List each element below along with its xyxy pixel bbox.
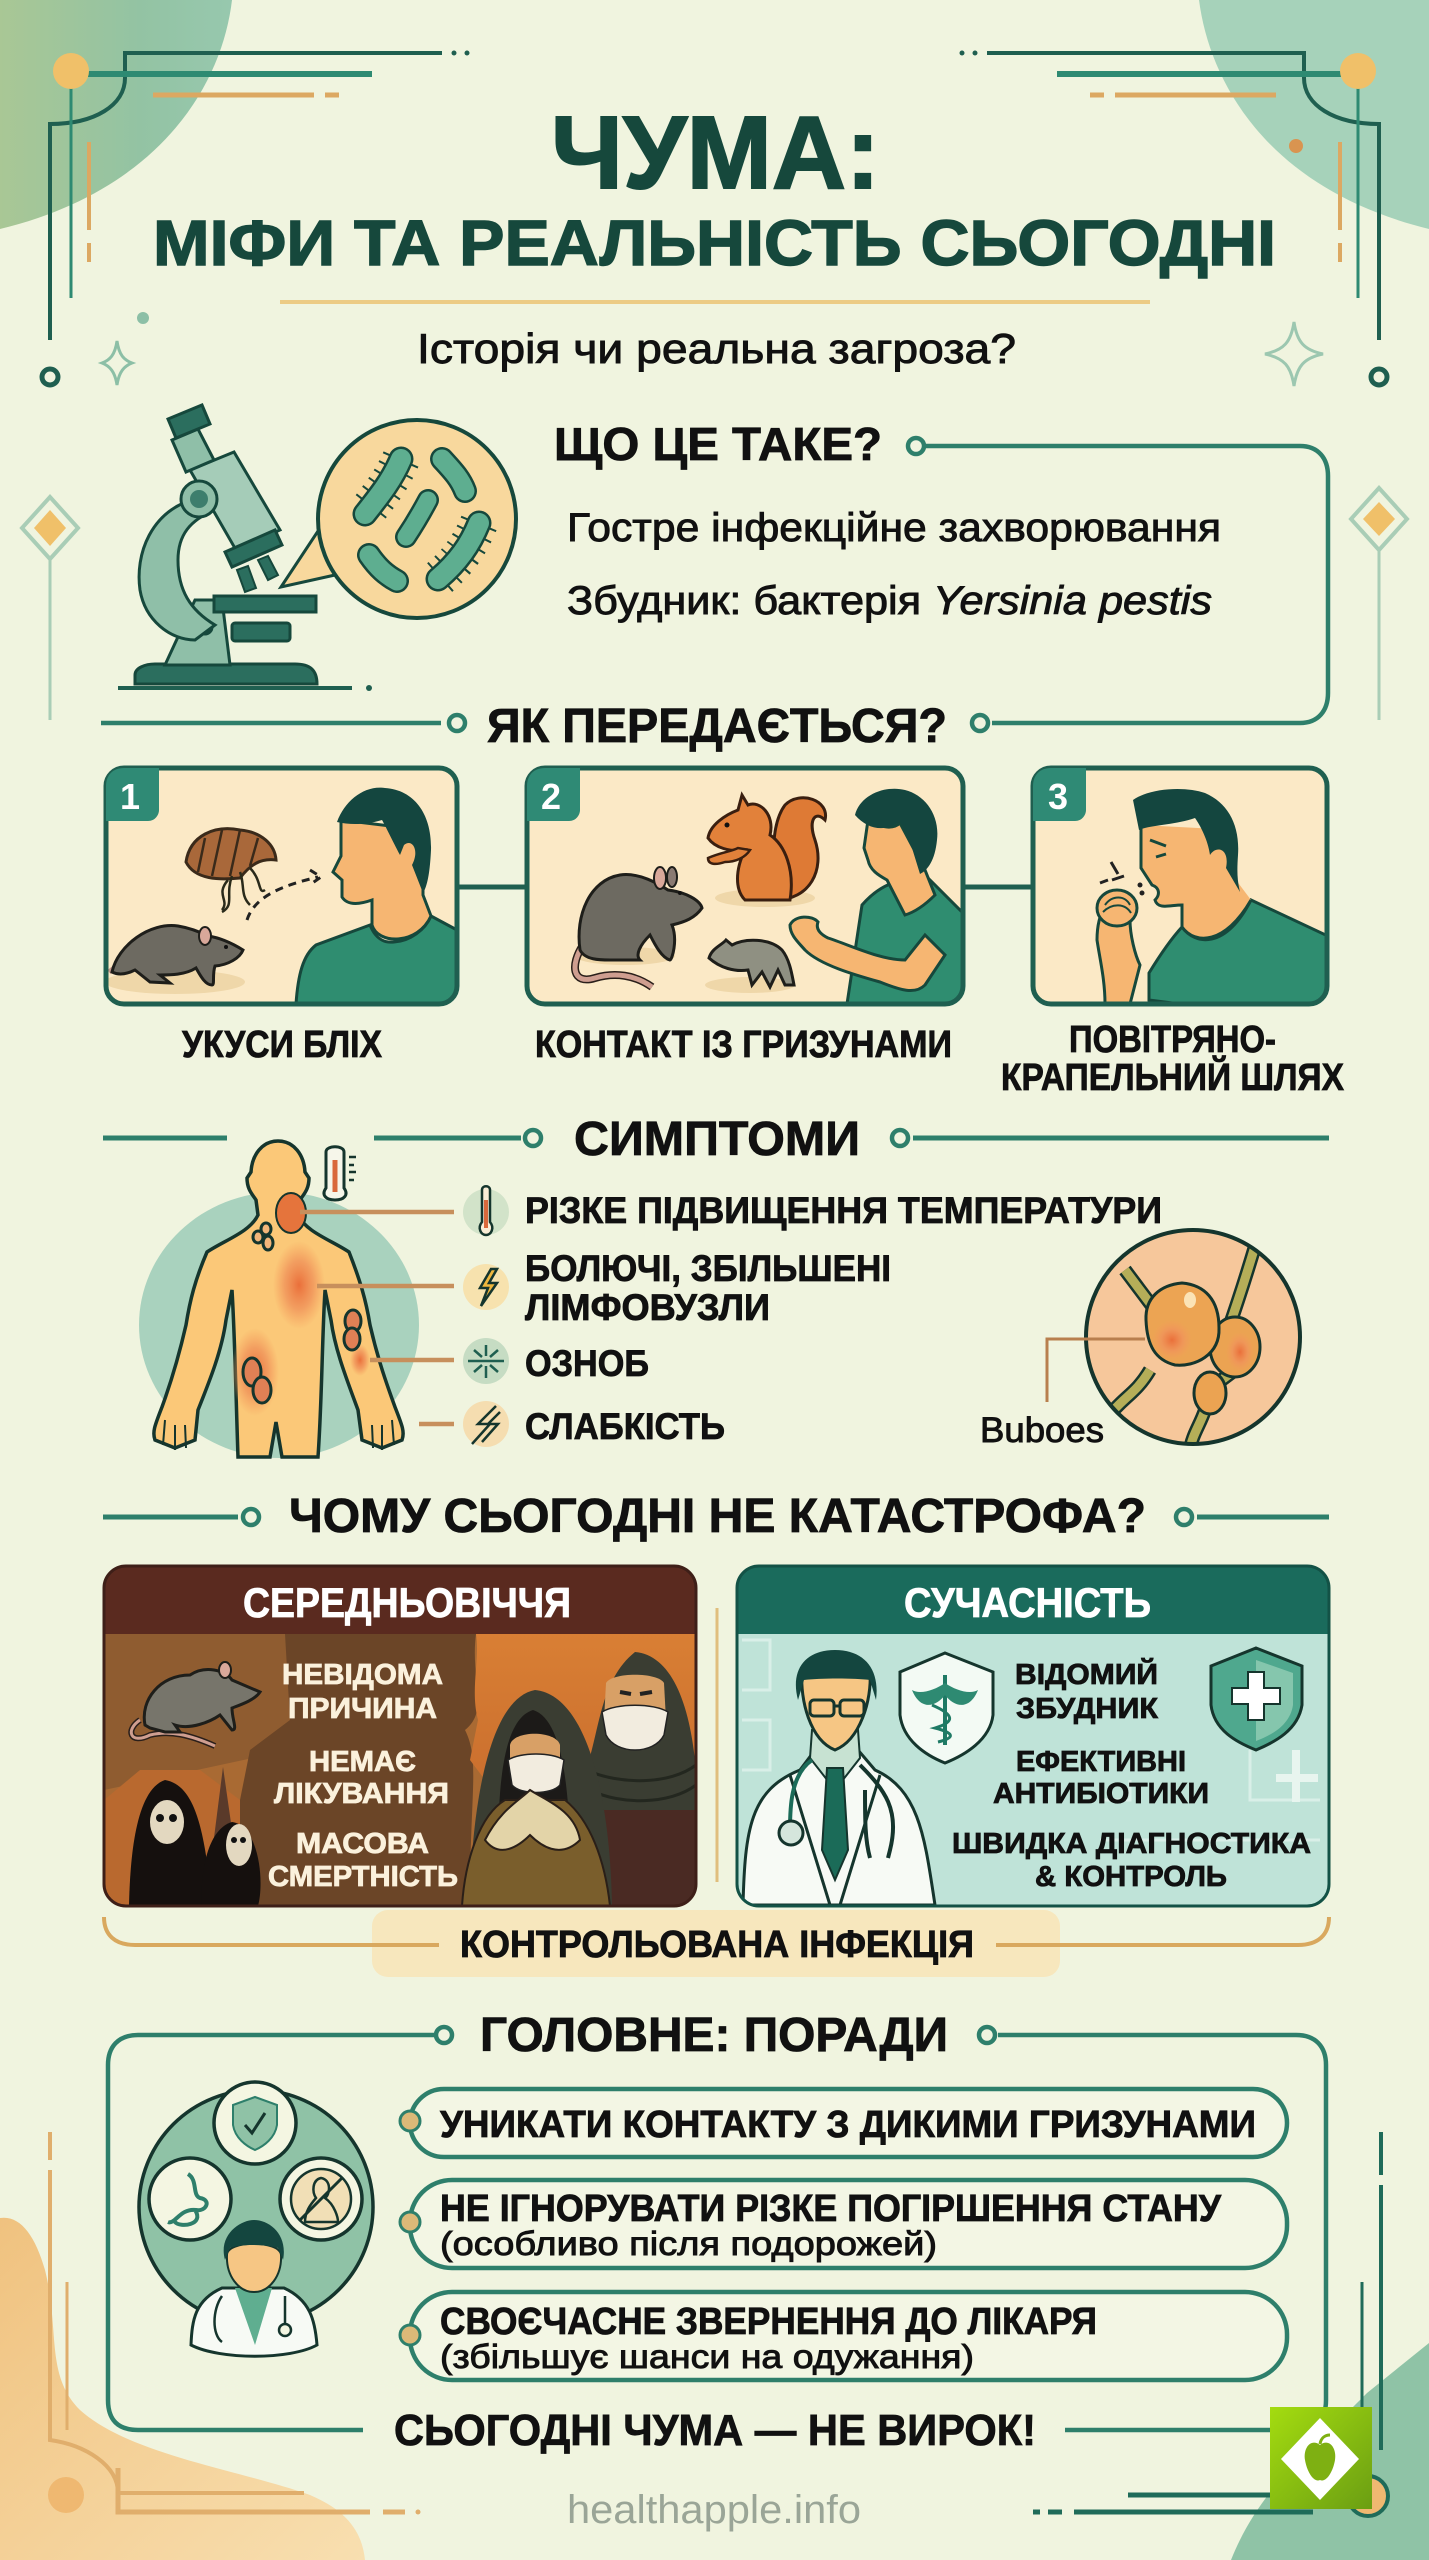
panel: contact with rodents [527,766,965,1005]
figure: doctor [743,1650,935,1905]
icon: thermometer [324,1147,356,1200]
divider between cards [716,1608,718,1882]
pill: avoid rodents: УНИКАТИ КОНТАКТУ З ДИКИМИ ГРИЗУНАМИ [440,2104,1256,2146]
section heading: why not a catastrophe [103,1490,1329,1543]
figure: woman in mask [462,1690,612,1906]
icon: fever [463,1186,509,1235]
bubo close-up [1047,1230,1300,1450]
panel: middle ages [104,1566,696,1906]
pill: do not ignore: НЕ ІГНОРУВАТИ РІЗКЕ ПОГІРШЕННЯ СТАНУ [440,2188,1221,2230]
section heading: transmission: ЯК ПЕРЕДАЄТЬСЯ? [487,700,947,753]
connectors between panels [457,884,1033,890]
number badge 2 [527,768,580,821]
card title: middle ages: СЕРЕДНЬОВІЧЧЯ [243,1579,571,1626]
icon cluster: doctor and advice [139,2082,373,2356]
card text: modern day: ШВИДКА ДІАГНОСТИКА [952,1828,1311,1860]
icon: small rat [709,940,794,987]
person coughing [1097,789,1330,1004]
label: rodent contact: КОНТАКТ ІЗ ГРИЗУНАМИ [535,1024,952,1066]
bracket [104,1917,1329,1945]
pill: see a doctor: (збільшує шанси на одужання) [440,2338,974,2375]
label: airborne [1001,1019,1345,1099]
frame: advice [108,2035,1326,2430]
number badge 3 [1033,768,1086,821]
title underline [280,300,1150,304]
figures: reapers [129,1780,261,1906]
title: ЧУМА: [551,95,880,210]
pill: avoid rodents [400,2089,1287,2157]
text: chills: ОЗНОБ [525,1343,649,1384]
card text: modern day: ЗБУДНИК [1016,1693,1158,1725]
section heading: symptoms [103,1113,1329,1166]
icon: no-contact [280,2158,362,2240]
number badge 1: 1 [120,776,140,817]
number badge 3: 3 [1048,776,1068,817]
text: controlled infection: КОНТРОЛЬОВАНА ІНФЕКЦІЯ [460,1924,974,1966]
card text: middle ages: СМЕРТНІСТЬ [268,1861,458,1893]
person [296,788,457,1004]
text: fever: РІЗКЕ ПІДВИЩЕННЯ ТЕМПЕРАТУРИ [525,1190,1162,1231]
decorative blob: top right [1199,0,1429,229]
title: МІФИ ТА РЕАЛЬНІСТЬ СЬОГОДНІ [153,207,1276,279]
heading: advice: ГОЛОВНЕ: ПОРАДИ [480,2009,948,2062]
card text: middle ages: НЕВІДОМА [282,1659,443,1691]
text: causative agent: Збудник: бактерія Yersinia pestis [567,579,1212,623]
subtitle: Історія чи реальна загроза? [417,325,1016,372]
site name: healthapple.info [567,2488,861,2532]
text: definition: Гостре інфекційне захворювання [567,506,1221,550]
icon: pain bolt [463,1264,509,1310]
card title: modern day: СУЧАСНІСТЬ [904,1579,1151,1626]
text: lymph nodes: БОЛЮЧІ, ЗБІЛЬШЕНІ [525,1248,891,1289]
card text: middle ages: МАСОВА [296,1828,429,1860]
icon: bacteria bubble [281,420,516,618]
panel: modern day [737,1566,1329,1906]
pill: see a doctor: СВОЄЧАСНЕ ЗВЕРНЕННЯ ДО ЛІКАРЯ [440,2301,1097,2343]
figure: man in mask [586,1652,696,1810]
closing statement: СЬОГОДНІ ЧУМА — НЕ ВИРОК! [394,2406,1036,2455]
card text: middle ages: ЛІКУВАННЯ [274,1778,449,1810]
section heading: what is it: ЩО ЦЕ ТАКЕ? [554,418,882,470]
card text: modern day: ВІДОМИЙ [1015,1657,1158,1691]
card text: modern day [952,1657,1311,1893]
number badge 1 [106,768,159,821]
card text: modern day: & КОНТРОЛЬ [1035,1861,1227,1893]
arrow: flea to person [247,870,321,920]
label: buboes: Buboes [980,1411,1104,1450]
icon: caduceus shield [900,1653,993,1763]
icon: rodent avoidance [149,2158,231,2240]
label: airborne: ПОВІТРЯНО- [1069,1019,1276,1061]
frame corner: bottom right [1033,2132,1388,2516]
card text: middle ages: НЕМАЄ [309,1746,416,1778]
pill: see a doctor [400,2292,1287,2380]
connector frame: what is it to transmission [908,438,1328,731]
body diagram [139,1141,419,1458]
card text: modern day: ЕФЕКТИВНІ [1016,1746,1186,1778]
side ornament: right diamond [1351,488,1407,720]
icon: large rat [575,867,702,987]
frame corner: top left [42,50,470,385]
section heading: symptoms: СИМПТОМИ [574,1113,860,1166]
icon: rat [131,1662,260,1746]
frame corner: bottom left [48,2132,420,2514]
text: lymph nodes: ЛІМФОВУЗЛИ [525,1287,770,1328]
label: flea bites: УКУСИ БЛІХ [182,1024,383,1066]
panel: airborne [1033,766,1330,1005]
side ornament: left diamond [22,497,78,720]
label: airborne: КРАПЕЛЬНИЙ ШЛЯХ [1001,1054,1345,1099]
frame corner: top right [960,50,1387,386]
highlight behind conclusion [372,1910,1060,1977]
icon: microscope with bacteria bubble [118,405,516,691]
decorative blob: top left [0,0,232,229]
number badge 2: 2 [541,776,561,817]
icon: squirrel [708,795,826,900]
decorative blob: bottom right [1231,2343,1429,2560]
card text: modern day: АНТИБІОТИКИ [993,1778,1209,1810]
icon: weakness [463,1401,509,1447]
decorative blob: bottom left [0,2218,365,2560]
text: lymph nodes [525,1248,891,1328]
section heading: why not a catastrophe: ЧОМУ СЬОГОДНІ НЕ КАТАСТРОФА? [289,1490,1146,1543]
section heading: transmission [101,700,947,753]
icon: church spire [214,1768,231,1838]
title [153,95,1276,279]
figure: small doctor [191,2220,317,2356]
pill: do not ignore [400,2180,1287,2268]
icon: shield check [214,2082,296,2164]
pill: do not ignore: (особливо після подорожей) [440,2225,937,2262]
text: weakness: СЛАБКІСТЬ [525,1406,725,1447]
icon: cross shield [1211,1648,1302,1750]
icon: flea [186,829,276,912]
symptom leader lines [300,1212,454,1424]
icon: rat [109,926,243,985]
icon: chills [463,1338,509,1384]
card text: middle ages [268,1659,458,1893]
person reaching [790,789,965,1004]
card text: middle ages: ПРИЧИНА [288,1693,437,1725]
panel: flea bites [105,766,457,1005]
logo: green apple tile [1270,2407,1372,2509]
